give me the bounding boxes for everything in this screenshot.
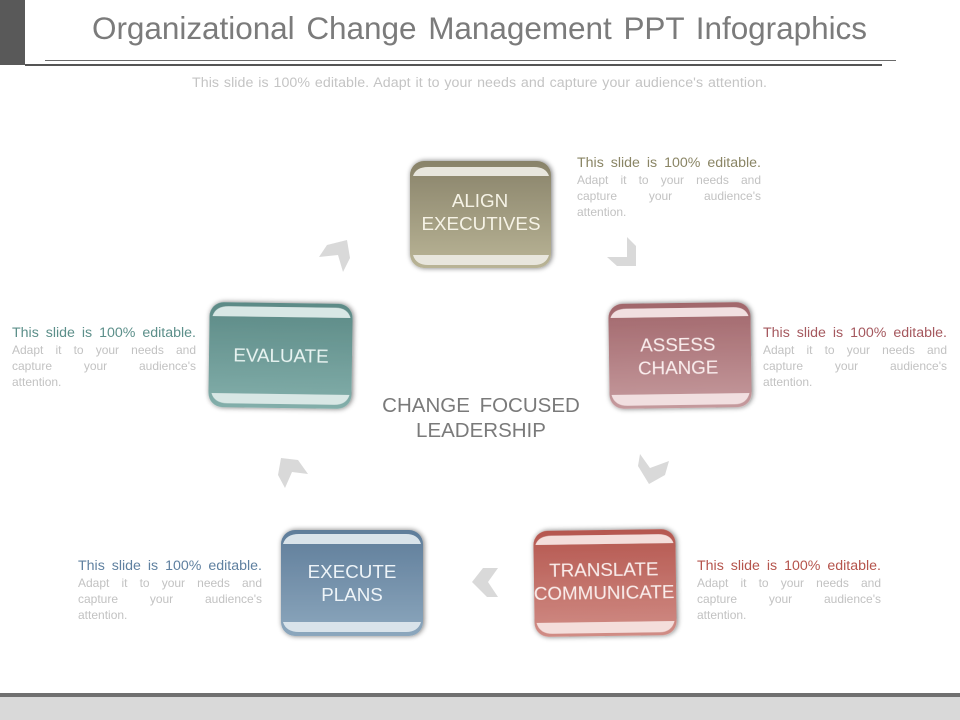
text block: assess change: This slide is 100% editable. bbox=[763, 324, 947, 340]
text block: assess change: capture your audience's bbox=[763, 359, 947, 373]
arrow: execute to evaluate bbox=[278, 458, 308, 488]
text block: evaluate: capture your audience's bbox=[12, 359, 196, 373]
arrow: evaluate to align bbox=[319, 240, 350, 272]
text block: align executives: This slide is 100% editable. bbox=[577, 154, 761, 170]
text block: assess change bbox=[763, 324, 947, 389]
text block: align executives: capture your audience's bbox=[577, 189, 761, 203]
box: evaluate bbox=[208, 302, 353, 409]
arrow: align to assess bbox=[607, 237, 636, 266]
text block: assess change: attention. bbox=[763, 375, 812, 389]
text block: evaluate: This slide is 100% editable. bbox=[12, 324, 196, 340]
footer band bbox=[0, 693, 960, 720]
text block: align executives: attention. bbox=[577, 205, 626, 219]
box: assess change bbox=[608, 302, 752, 409]
text block: evaluate: Adapt it to your needs and bbox=[12, 343, 196, 357]
box: execute plans: PLANS bbox=[321, 584, 383, 605]
text block: evaluate: attention. bbox=[12, 375, 61, 389]
box: align executives: EXECUTIVES bbox=[422, 213, 540, 234]
box: translate communicate: TRANSLATE bbox=[549, 558, 659, 581]
text block: execute plans: This slide is 100% editable. bbox=[78, 558, 262, 574]
text block: translate communicate: attention. bbox=[697, 608, 746, 622]
text block: assess change: Adapt it to your needs and bbox=[763, 343, 947, 357]
center label: CHANGE FOCUSED bbox=[382, 394, 580, 417]
header rules bbox=[25, 60, 896, 66]
box: evaluate: EVALUATE bbox=[233, 344, 329, 367]
arrow: assess to translate bbox=[638, 454, 669, 484]
box: execute plans: EXECUTE bbox=[308, 561, 396, 582]
box: translate communicate: COMMUNICATE bbox=[534, 581, 675, 604]
text block: execute plans: Adapt it to your needs and bbox=[78, 576, 262, 590]
box: align executives bbox=[410, 161, 551, 268]
text block: translate communicate: capture your audience's bbox=[697, 592, 881, 606]
text block: align executives: Adapt it to your needs and bbox=[577, 173, 761, 187]
text block: translate communicate: Adapt it to your needs and bbox=[697, 576, 881, 590]
box: assess change: CHANGE bbox=[638, 356, 718, 379]
text block: execute plans: attention. bbox=[78, 608, 127, 622]
box: translate communicate bbox=[533, 529, 677, 637]
center label bbox=[382, 394, 580, 442]
text block: evaluate bbox=[12, 324, 196, 389]
box: align executives: ALIGN bbox=[452, 190, 508, 211]
text block: align executives bbox=[577, 154, 761, 219]
arrow: translate to execute bbox=[472, 568, 498, 597]
text block: execute plans: capture your audience's bbox=[78, 592, 262, 606]
box: assess change: ASSESS bbox=[640, 334, 716, 356]
header corner block bbox=[0, 0, 25, 65]
text block: translate communicate bbox=[697, 558, 881, 622]
subtitle: This slide is 100% editable. Adapt it to your needs and capture your audience's attention. bbox=[192, 75, 767, 91]
center label: LEADERSHIP bbox=[416, 419, 546, 442]
text block: translate communicate: This slide is 100% editable. bbox=[697, 558, 881, 574]
title: Organizational Change Management PPT Infographics bbox=[92, 10, 867, 46]
box: execute plans bbox=[281, 530, 423, 636]
text block: execute plans bbox=[78, 558, 262, 622]
